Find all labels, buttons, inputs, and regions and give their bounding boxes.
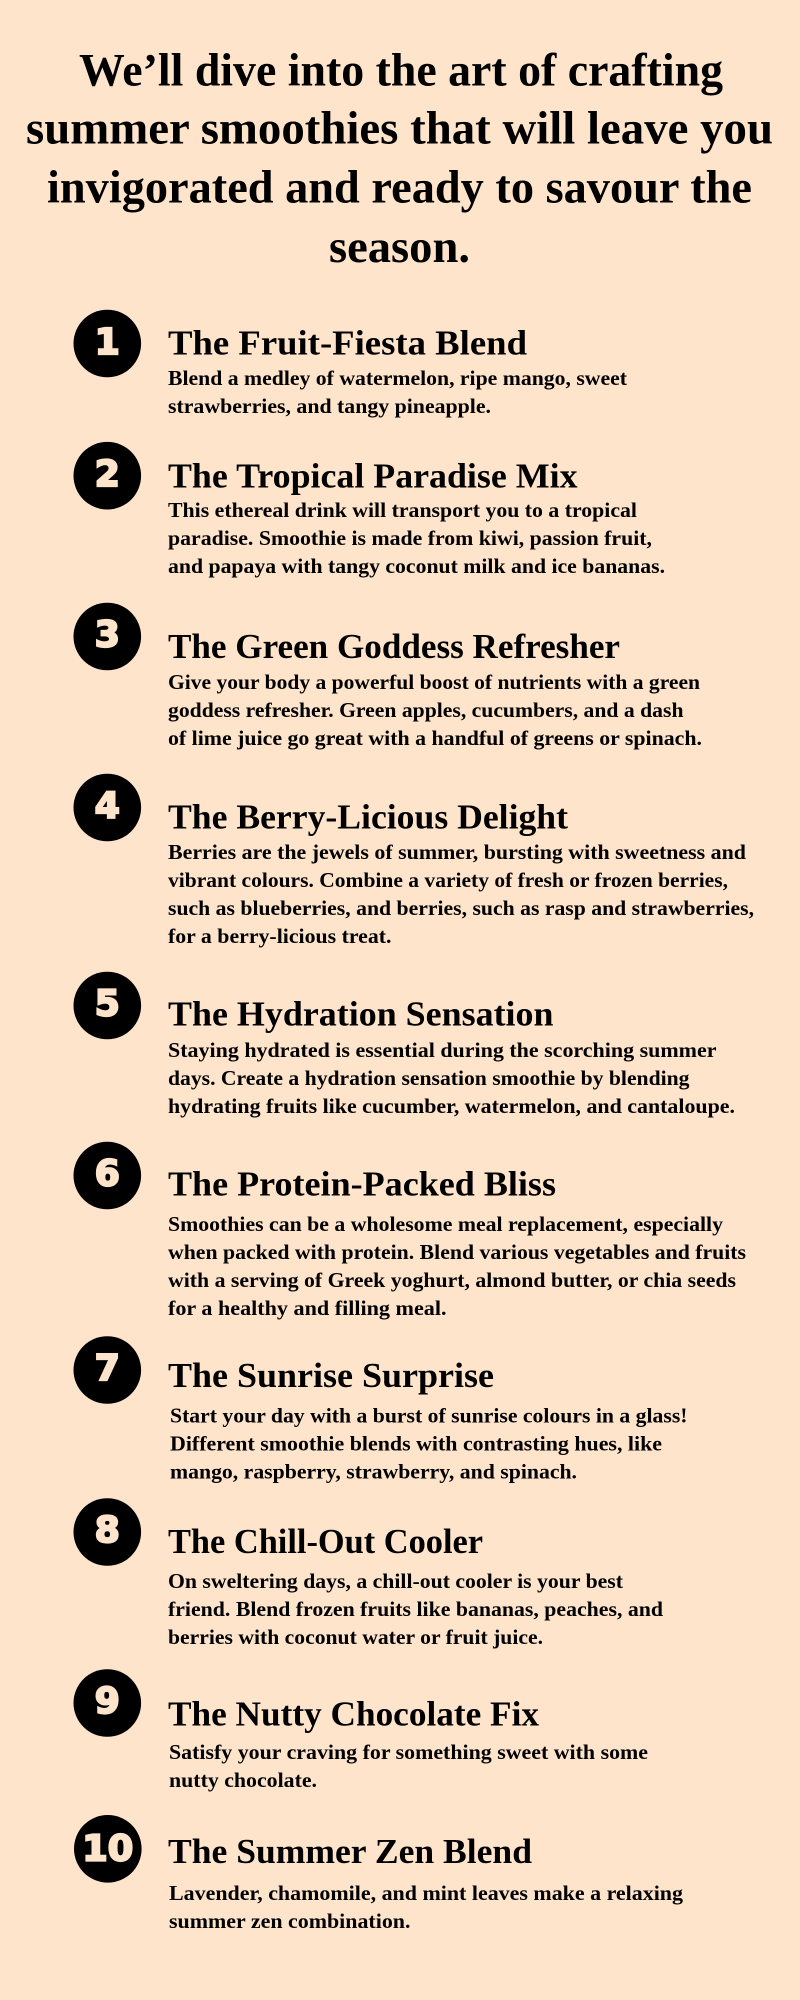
heading 9: The Nutty Chocolate Fix (168, 1694, 539, 1734)
body 4: such as blueberries, and berries, such as rasp and strawberries, (168, 896, 754, 920)
number badge 6 (74, 1142, 141, 1209)
body 4: vibrant colours. Combine a variety of fresh or frozen berries, (168, 868, 728, 892)
body 2: and papaya with tangy coconut milk and ice bananas. (168, 554, 665, 578)
item 8: The Chill-Out Cooler (74, 1498, 663, 1649)
body 8 (168, 1569, 663, 1649)
number badge 2 (74, 442, 141, 510)
body 7: mango, raspberry, strawberry, and spinach. (170, 1460, 577, 1484)
body 6: Smoothies can be a wholesome meal replacement, especially (168, 1212, 723, 1236)
number badge 3: 3 (95, 614, 120, 656)
body 4: Berries are the jewels of summer, bursting with sweetness and (168, 840, 746, 864)
body 5: days. Create a hydration sensation smoothie by blending (168, 1066, 690, 1090)
body 6 (168, 1212, 746, 1320)
body 3: of lime juice go great with a handful of greens or spinach. (168, 726, 702, 750)
heading 5: The Hydration Sensation (168, 994, 554, 1034)
item 2: The Tropical Paradise Mix (74, 442, 665, 578)
title: We’ll dive into the art of crafting (79, 46, 723, 96)
heading 8: The Chill-Out Cooler (168, 1522, 483, 1561)
body 9: nutty chocolate. (169, 1768, 317, 1792)
body 1: strawberries, and tangy pineapple. (168, 394, 491, 418)
title: summer smoothies that will leave you (26, 104, 773, 154)
item 10: The Summer Zen Blend (74, 1815, 683, 1933)
body 1: Blend a medley of watermelon, ripe mango, sweet (168, 366, 628, 390)
item 7: The Sunrise Surprise (74, 1336, 688, 1484)
item 9: The Nutty Chocolate Fix (74, 1669, 648, 1792)
body 7: Start your day with a burst of sunrise colours in a glass! (170, 1404, 688, 1428)
body 3: goddess refresher. Green apples, cucumbers, and a dash (168, 698, 684, 722)
body 2: This ethereal drink will transport you to a tropical (168, 498, 637, 522)
body 8: berries with coconut water or fruit juice. (168, 1625, 543, 1649)
heading 4: The Berry-Licious Delight (168, 798, 568, 836)
item 5: The Hydration Sensation (74, 972, 735, 1118)
title: invigorated and ready to savour the (47, 162, 752, 214)
item 3: The Green Goddess Refresher (74, 603, 702, 750)
heading 6: The Protein-Packed Bliss (168, 1164, 556, 1204)
heading 1: The Fruit-Fiesta Blend (168, 324, 528, 362)
heading 2: The Tropical Paradise Mix (168, 456, 578, 496)
number badge 8 (74, 1498, 141, 1566)
number badge 10 (74, 1815, 142, 1883)
number badge 9 (74, 1669, 141, 1737)
number badge 1 (74, 310, 141, 377)
body 3 (168, 670, 702, 750)
title (26, 46, 773, 273)
body 10: Lavender, chamomile, and mint leaves make a relaxing (169, 1881, 683, 1905)
body 6: with a serving of Greek yoghurt, almond butter, or chia seeds (168, 1268, 736, 1292)
body 10: summer zen combination. (169, 1909, 410, 1933)
number badge 5 (74, 972, 141, 1039)
body 4: for a berry-licious treat. (168, 924, 392, 948)
number badge 7: 7 (95, 1348, 120, 1389)
number badge 3 (74, 603, 141, 670)
heading 3: The Green Goddess Refresher (168, 627, 620, 666)
number badge 6: 6 (95, 1154, 120, 1194)
body 4 (168, 840, 754, 948)
body 6: when packed with protein. Blend various vegetables and fruits (168, 1240, 746, 1264)
item 4: The Berry-Licious Delight (74, 774, 754, 948)
number badge 1: 1 (95, 322, 120, 363)
body 9: Satisfy your craving for something sweet with some (169, 1740, 648, 1764)
body 8: friend. Blend frozen fruits like bananas, peaches, and (168, 1597, 663, 1621)
number badge 7 (74, 1336, 141, 1404)
item 1: The Fruit-Fiesta Blend (74, 310, 628, 418)
body 7: Different smoothie blends with contrasting hues, like (170, 1432, 662, 1456)
heading 10: The Summer Zen Blend (168, 1832, 533, 1871)
body 1 (168, 366, 628, 418)
body 5: Staying hydrated is essential during the scorching summer (168, 1038, 717, 1062)
body 8: On sweltering days, a chill-out cooler is your best (168, 1569, 624, 1593)
body 2: paradise. Smoothie is made from kiwi, passion fruit, (168, 526, 652, 550)
number badge 8: 8 (95, 1510, 120, 1551)
number badge 2: 2 (95, 454, 120, 495)
heading 7: The Sunrise Surprise (168, 1356, 494, 1395)
number badge 4: 4 (95, 786, 120, 826)
number badge 4 (74, 774, 141, 841)
body 10 (169, 1881, 683, 1933)
body 6: for a healthy and filling meal. (168, 1296, 446, 1320)
body 9 (169, 1740, 648, 1792)
body 2 (168, 498, 665, 578)
body 7 (170, 1404, 688, 1484)
body 5: hydrating fruits like cucumber, watermelon, and cantaloupe. (168, 1094, 735, 1118)
title: season. (329, 222, 470, 273)
number badge 10: 10 (82, 1828, 133, 1870)
body 3: Give your body a powerful boost of nutrients with a green (168, 670, 700, 694)
body 5 (168, 1038, 735, 1118)
item 6: The Protein-Packed Bliss (74, 1142, 746, 1320)
number badge 5: 5 (95, 984, 120, 1024)
number badge 9: 9 (95, 1681, 120, 1722)
